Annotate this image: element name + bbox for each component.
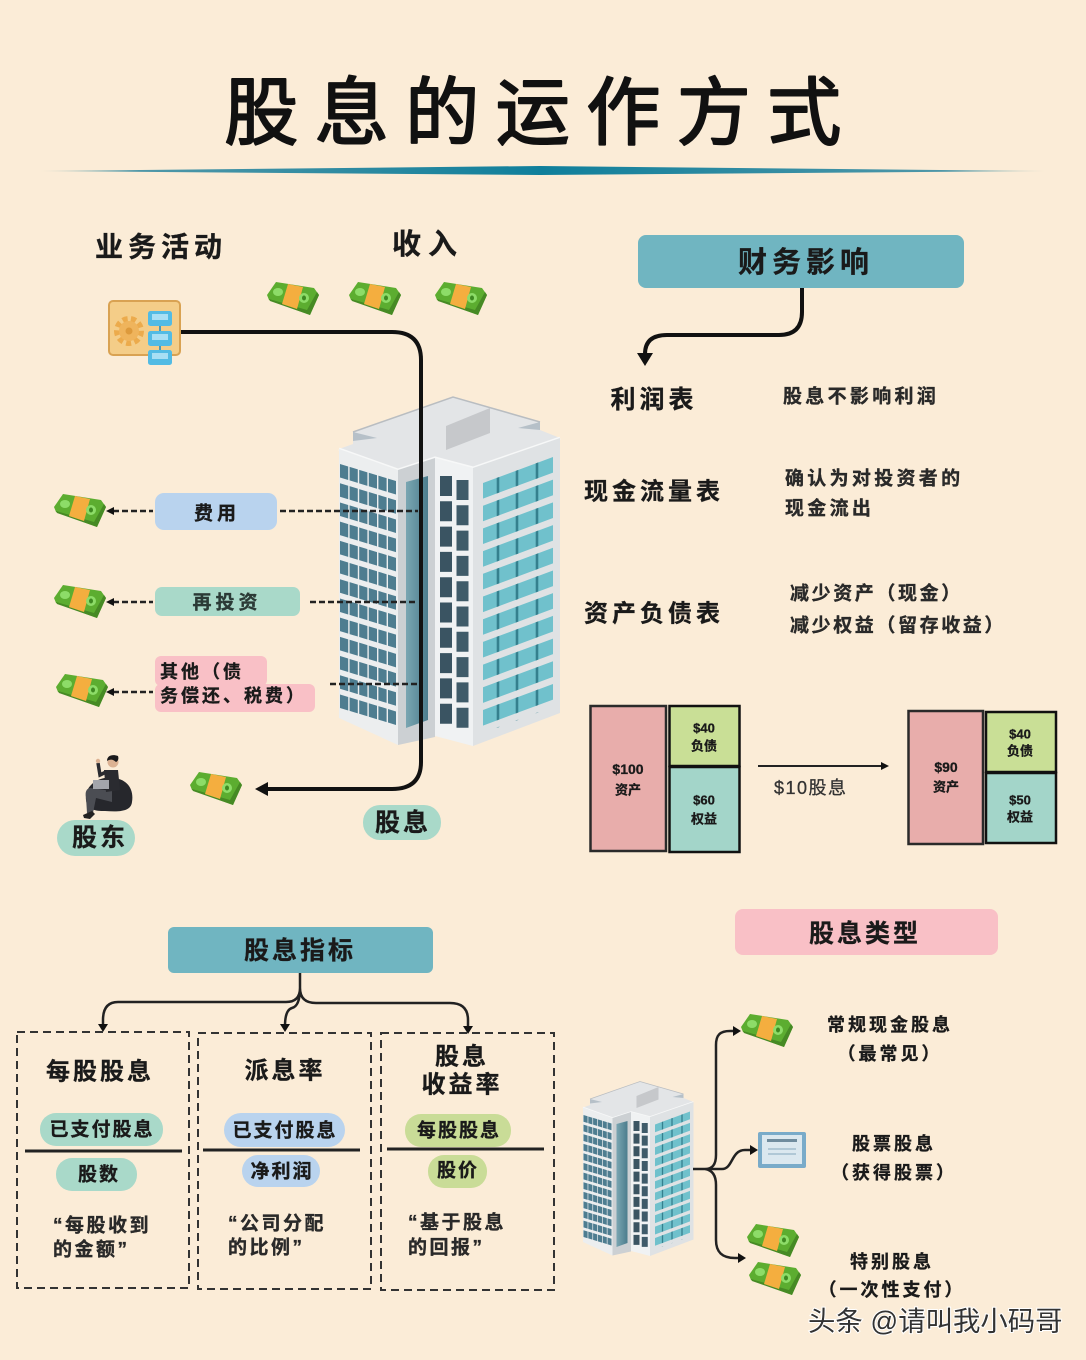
- heading: business activities: 业务活动: [95, 232, 227, 262]
- text: stock dividend: [831, 1133, 957, 1183]
- panel: dividend yield: 股息: [435, 1044, 489, 1070]
- label: reinvestment: 再投资: [192, 592, 262, 614]
- arrow: dividend type branches: [693, 1026, 758, 1263]
- arrow: reinvestment outflow: [106, 598, 418, 606]
- chart: balance after: [908, 711, 1056, 844]
- text: special dividend: （一次性支付）: [818, 1280, 966, 1300]
- icon: office building: [339, 397, 560, 746]
- chart: balance after: $90: [934, 759, 958, 775]
- label: other: 务偿还、税费）: [160, 686, 307, 706]
- row: income statement: [610, 384, 939, 414]
- heading: revenue: 收入: [392, 228, 464, 261]
- text: regular cash dividend: [827, 1014, 953, 1064]
- icon: small building: [583, 1082, 694, 1256]
- panel: dividend yield: 股价: [437, 1160, 479, 1182]
- row: balance sheet: 资产负债表: [584, 600, 724, 628]
- row: cash flow statement: [584, 468, 963, 520]
- label: expenses: [155, 493, 277, 530]
- row: cash flow statement: 现金流量表: [584, 478, 724, 506]
- panel: earnings per share: 已支付股息: [49, 1118, 155, 1140]
- heading: dividend metrics: [168, 927, 433, 973]
- icon: money dividend: [190, 772, 242, 805]
- heading: dividend types: [735, 909, 998, 955]
- label: expenses: 费用: [194, 502, 240, 524]
- chart: balance after: 负债: [1007, 744, 1033, 758]
- panel: dividend yield: 的回报”: [408, 1236, 485, 1258]
- panel: payout ratio: 派息率: [244, 1058, 326, 1084]
- icon: money regular dividend: [741, 1014, 793, 1047]
- chart: balance before: [590, 706, 740, 852]
- panel: earnings per share: 的金额”: [53, 1238, 130, 1260]
- chart: balance before: $60: [693, 792, 715, 808]
- panel: payout ratio: 的比例”: [228, 1236, 305, 1258]
- label: dividend: 股息: [375, 809, 431, 837]
- label: other: 其他（债: [160, 662, 244, 682]
- panel: dividend flow: [54, 228, 560, 856]
- arrow: cash flow to dividend: [181, 332, 421, 796]
- panel: financial impact: [584, 235, 1056, 852]
- row: balance sheet: 减少资产（现金）: [790, 582, 963, 604]
- text: special dividend: 特别股息: [850, 1251, 934, 1272]
- row: cash flow statement: 现金流出: [785, 496, 874, 520]
- heading: dividend metrics: 股息指标: [244, 937, 356, 965]
- watermark: 头条 @请叫我小码哥: [808, 1306, 1063, 1336]
- arrow: other outflow: [106, 684, 418, 696]
- chart: balance after: $40: [1009, 726, 1031, 742]
- panel: payout ratio: “公司分配: [228, 1212, 326, 1234]
- label: shareholder: 股东: [72, 824, 128, 852]
- chart: balance after: 权益: [1007, 810, 1033, 824]
- chart: balance before: 负债: [691, 738, 717, 754]
- row: income statement: 股息不影响利润: [783, 384, 939, 408]
- panel: payout ratio: 净利润: [250, 1160, 314, 1182]
- icon: money 3: [435, 282, 487, 315]
- chart: balance after: $50: [1009, 792, 1031, 808]
- panel: dividend metrics: [17, 927, 554, 1290]
- icon: money 2: [349, 282, 401, 315]
- panel: payout ratio: [198, 1033, 371, 1289]
- label: other: [155, 656, 315, 712]
- arrow: ten dollar dividend: $10股息: [774, 778, 848, 798]
- icon: stock certificate: [758, 1132, 806, 1168]
- row: balance sheet: [584, 582, 1006, 636]
- row: income statement: 利润表: [610, 386, 698, 414]
- icon: shareholder: [83, 755, 132, 819]
- title: 股息的运作方式: [224, 54, 858, 160]
- text: stock dividend: 股票股息: [852, 1133, 936, 1154]
- label: dividend: [363, 805, 441, 840]
- text: regular cash dividend: （最常见）: [838, 1044, 942, 1064]
- chart: balance before: 权益: [691, 812, 717, 826]
- heading: dividend types: 股息类型: [809, 920, 921, 948]
- heading: financial impact: [638, 235, 964, 288]
- arrow: ten dollar dividend: [758, 762, 889, 798]
- panel: earnings per share: 每股股息: [46, 1058, 154, 1086]
- label: reinvestment: [155, 587, 300, 616]
- arrow: expenses outflow: [106, 507, 418, 515]
- panel: earnings per share: “每股收到: [53, 1214, 151, 1236]
- row: cash flow statement: 确认为对投资者的: [785, 468, 963, 490]
- arrow: impact: [637, 288, 802, 366]
- icon: money expenses: [54, 494, 106, 527]
- chart: balance before: 资产: [615, 782, 641, 798]
- panel: earnings per share: [17, 1032, 189, 1288]
- panel: dividend yield: 每股股息: [417, 1118, 501, 1142]
- panel: earnings per share: 股数: [78, 1164, 120, 1186]
- panel: dividend yield: “基于股息: [408, 1210, 506, 1234]
- panel: dividend types: [583, 909, 998, 1300]
- chart: balance before: $40: [693, 720, 715, 736]
- panel: dividend yield: [381, 1033, 554, 1290]
- label: shareholder: [57, 820, 135, 856]
- icon: money special dividend 2: [749, 1262, 801, 1295]
- text: stock dividend: （获得股票）: [831, 1162, 957, 1183]
- icon: money reinvestment: [54, 585, 106, 618]
- chart: balance before: $100: [612, 761, 644, 777]
- text: special dividend: [818, 1251, 966, 1300]
- icon: money special dividend 1: [747, 1224, 799, 1257]
- panel: payout ratio: 已支付股息: [232, 1118, 338, 1142]
- panel: dividend yield: 收益率: [422, 1072, 502, 1098]
- icon: business process: [109, 301, 180, 365]
- row: balance sheet: 减少权益（留存收益）: [790, 614, 1006, 636]
- icon: money 1: [267, 282, 319, 315]
- title underline: [40, 166, 1046, 175]
- text: regular cash dividend: 常规现金股息: [827, 1014, 953, 1035]
- heading: financial impact: 财务影响: [738, 246, 874, 279]
- arrow: metrics tree: [98, 973, 473, 1034]
- icon: money other: [56, 674, 108, 707]
- chart: balance after: 资产: [933, 780, 959, 794]
